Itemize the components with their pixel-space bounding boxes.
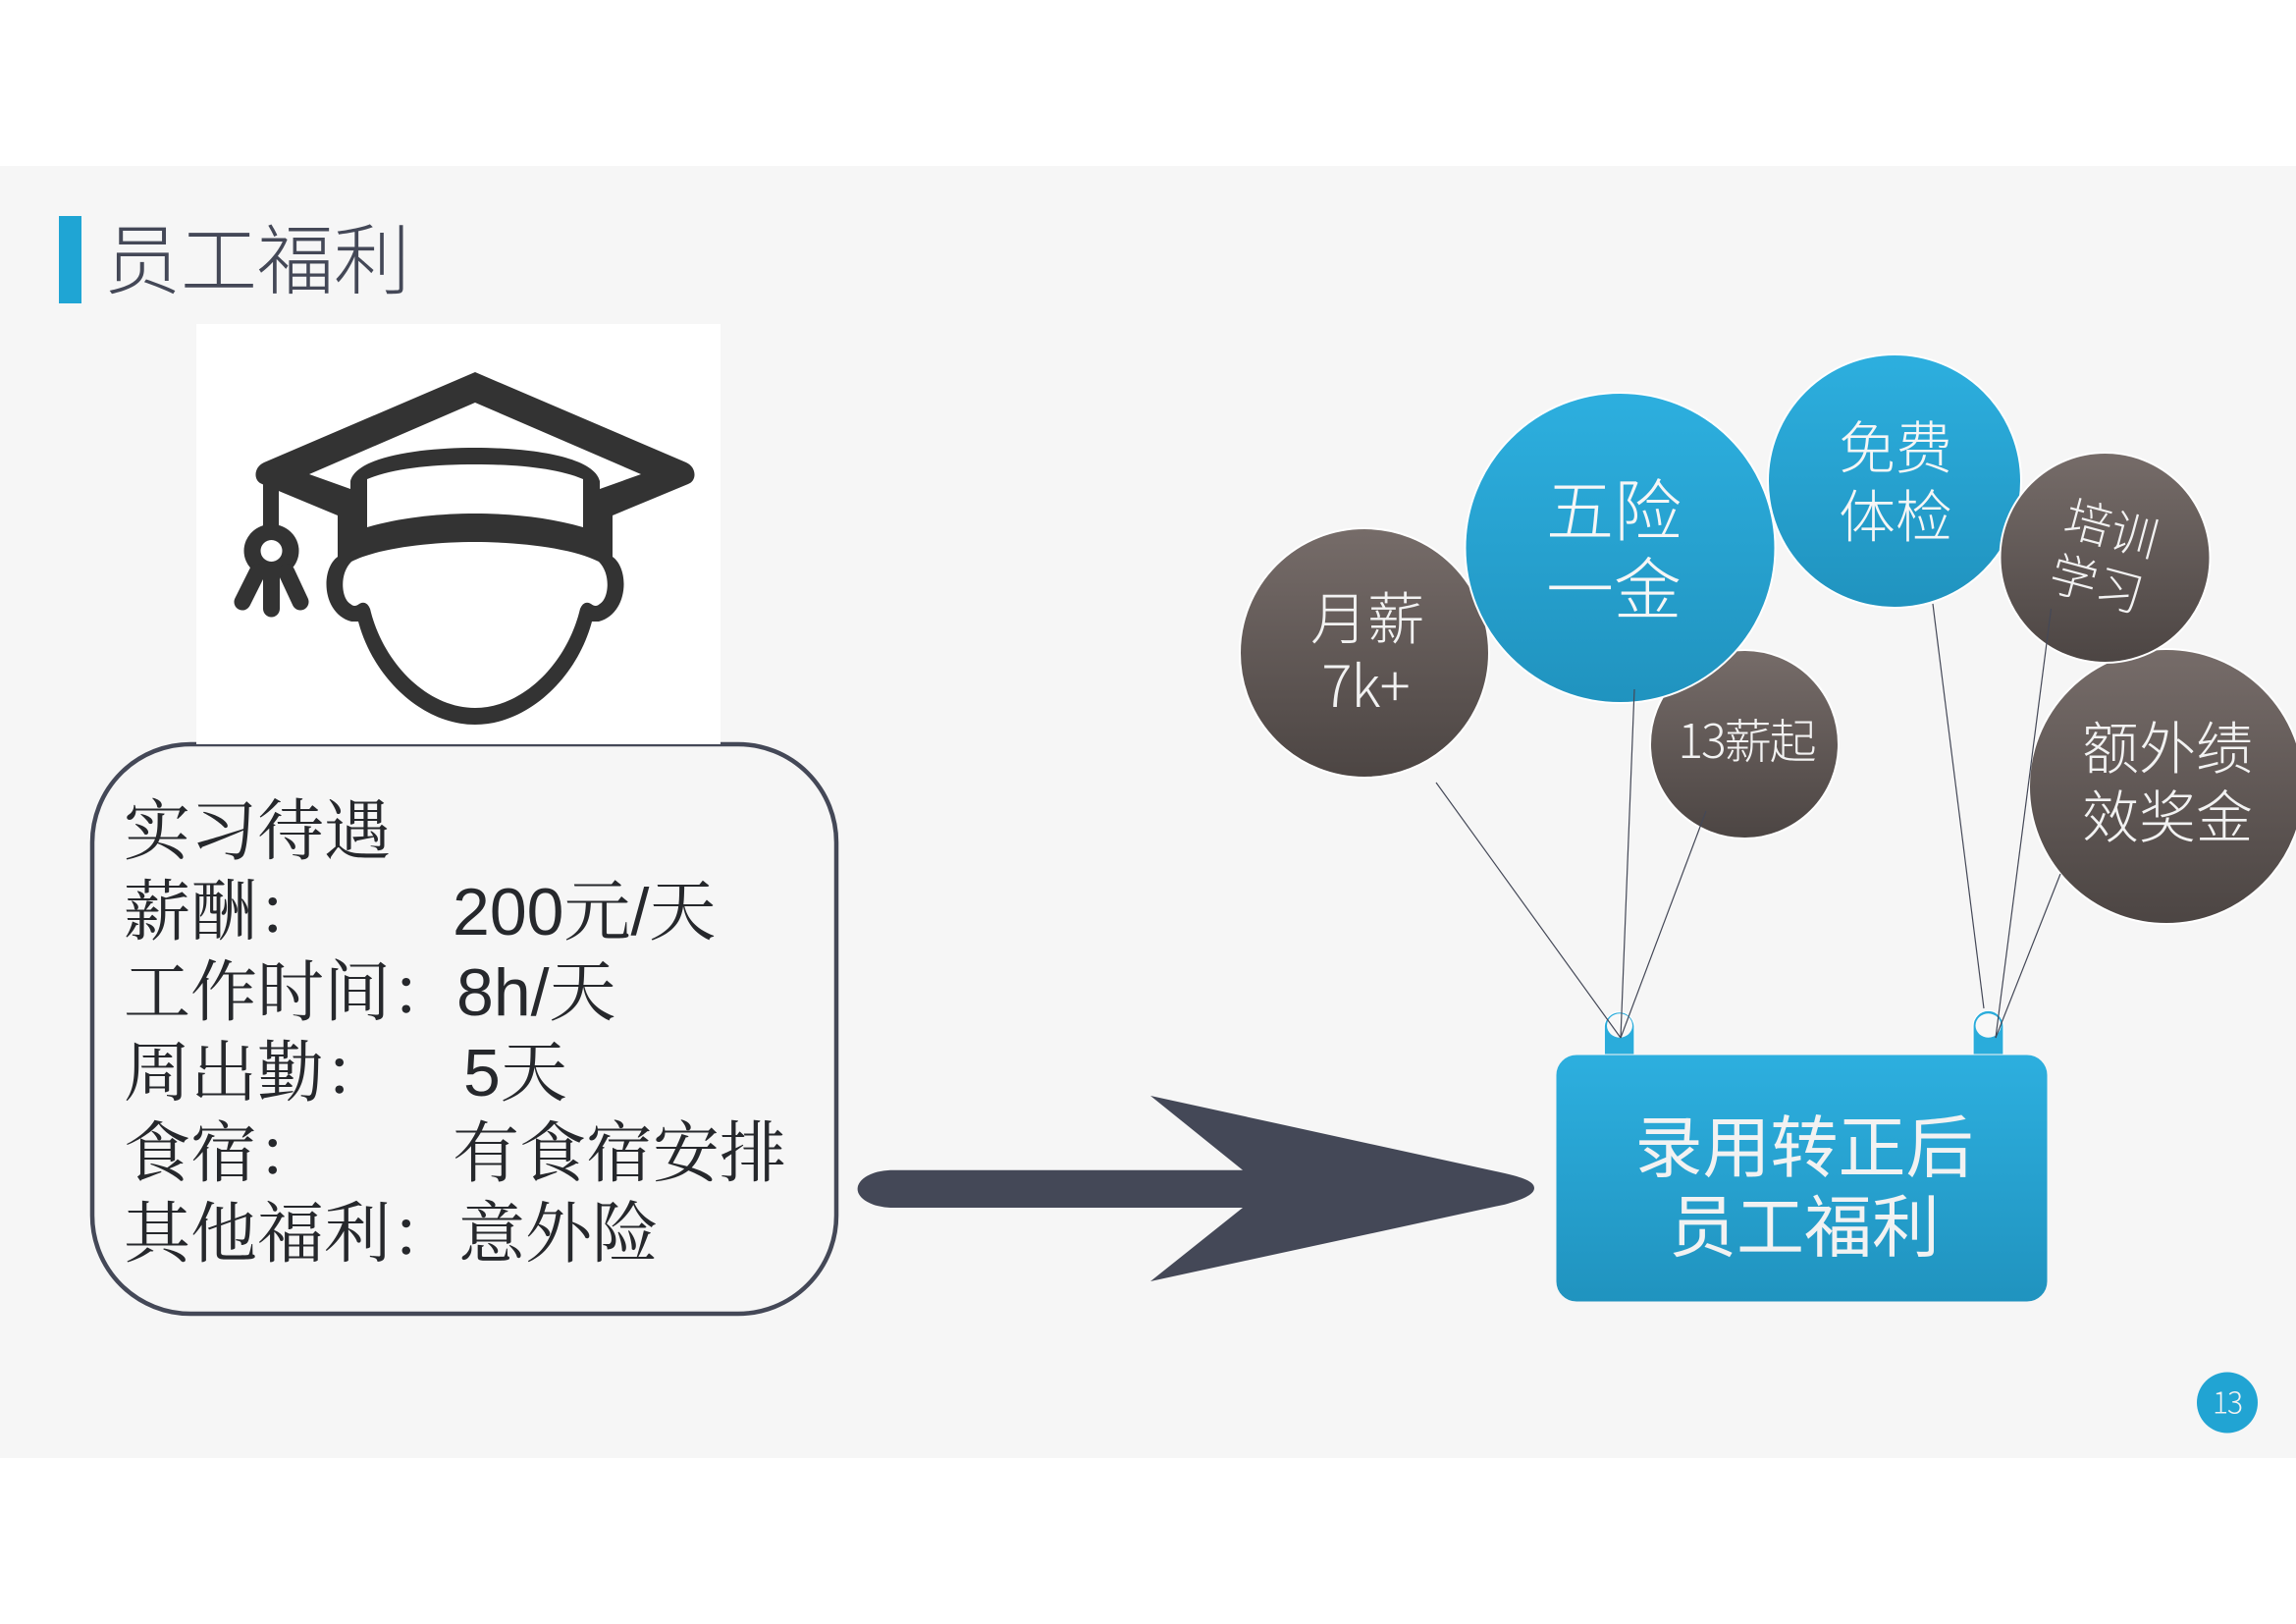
balloon: free health check: 免费 <box>1839 403 1952 485</box>
heading accent bar <box>59 216 81 303</box>
balloon: monthly salary: 月薪 <box>1310 573 1424 656</box>
balloon: extra bonus: 效奖金 <box>2082 772 2253 854</box>
internship text block: 意外险 <box>458 1197 659 1272</box>
balloon: social insurance <box>1465 393 1775 703</box>
internship text block: 其他福利： <box>124 1197 457 1272</box>
page number badge <box>2197 1373 2258 1434</box>
internship text block: 食宿： <box>124 1116 324 1191</box>
balloon: monthly salary <box>1240 528 1489 778</box>
balloon: 13 months salary: 13薪起 <box>1678 703 1816 772</box>
balloon: 13 months salary <box>1650 650 1839 839</box>
hanging sign <box>1556 1010 2048 1302</box>
balloon: extra bonus: 额外绩 <box>2082 703 2253 785</box>
sign holes <box>1607 1013 1632 1038</box>
internship text block <box>124 794 786 1272</box>
sign board <box>1556 1055 2048 1302</box>
panel outline <box>92 744 836 1314</box>
internship text block: 8h/天 <box>456 955 616 1030</box>
balloon: monthly salary: 7k+ <box>1321 641 1410 724</box>
icon: tassel <box>242 481 300 609</box>
internship text block: 5天 <box>463 1036 567 1110</box>
balloon: free health check: 体检 <box>1839 471 1952 554</box>
sign text: 员工福利 <box>1669 1172 1940 1271</box>
internship text block: 周出勤： <box>124 1036 391 1110</box>
internship text block: 工作时间： <box>124 955 457 1030</box>
balloon: social insurance: 五险 <box>1546 457 1682 555</box>
internship text block: 200元/天 <box>453 875 716 949</box>
panel: internship benefits <box>92 744 836 1314</box>
balloon: free health check <box>1768 354 2021 608</box>
balloon: extra bonus <box>2029 649 2296 924</box>
slide background <box>0 166 2296 1458</box>
arrow <box>858 1096 1534 1281</box>
balloon strings <box>1436 604 2060 1038</box>
icon: graduate with mortarboard <box>196 324 721 744</box>
sign tabs <box>1604 1010 2003 1060</box>
balloon: training: 培训 <box>2057 480 2166 570</box>
heading <box>59 200 410 310</box>
balloon: training: 学习 <box>2043 535 2152 625</box>
internship text block: 薪酬： <box>124 875 324 949</box>
internship text block: 有食宿安排 <box>453 1116 786 1191</box>
balloon: social insurance: 一金 <box>1546 535 1682 633</box>
sign text: 录用转正后 <box>1635 1093 1973 1191</box>
page number badge: 13 <box>2213 1379 2242 1422</box>
internship text block: 实习待遇 <box>124 794 391 869</box>
heading text: 员工福利 <box>104 200 410 310</box>
balloon: training <box>2001 453 2211 663</box>
